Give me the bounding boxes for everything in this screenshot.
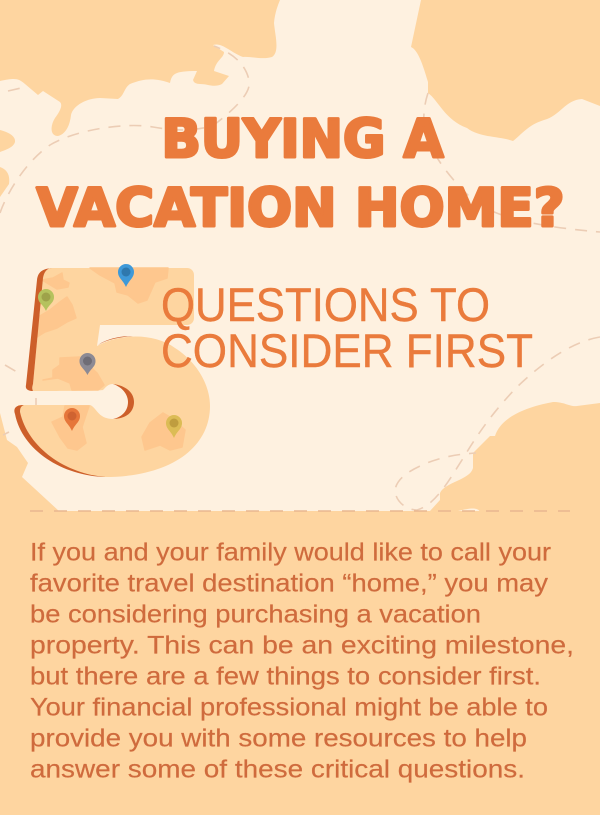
bottom panel — [0, 511, 600, 815]
map: top right land — [411, 0, 600, 141]
dashed divider — [30, 510, 570, 512]
body paragraph: Your financial professional might be able to — [30, 694, 548, 722]
body paragraph: answer some of these critical questions. — [30, 756, 525, 784]
map: top left land — [0, 0, 280, 136]
pin: blue — [118, 264, 134, 287]
body paragraph: be considering purchasing a vacation — [30, 600, 481, 628]
continents on number 5 — [37, 268, 185, 450]
subtitle: CONSIDER FIRST — [161, 324, 533, 377]
big number 5 — [14, 268, 210, 477]
number 5 shadow — [14, 268, 134, 477]
title — [36, 109, 564, 239]
map pins — [38, 264, 182, 438]
pin: green — [38, 289, 54, 311]
body paragraph: provide you with some resources to help — [30, 724, 527, 752]
title: VACATION HOME? — [36, 178, 564, 239]
pin: grey — [80, 353, 96, 375]
subtitle: QUESTIONS TO — [161, 278, 490, 331]
number 5 body — [18, 268, 210, 477]
map: left edge islands — [0, 130, 15, 197]
map: bottom right land — [430, 402, 600, 512]
body paragraph: favorite travel destination “home,” you may — [30, 570, 549, 598]
title: BUYING A — [162, 109, 444, 170]
pin: orange — [64, 408, 80, 431]
body paragraph: If you and your family would like to call your — [30, 538, 551, 566]
dashed travel routes — [0, 46, 600, 510]
map: bottom left land — [0, 413, 60, 512]
pin: yellow — [166, 415, 182, 438]
body paragraph: property. This can be an exciting milestone, — [30, 632, 574, 660]
body paragraph — [30, 538, 574, 784]
body paragraph: but there are a few things to consider first. — [30, 662, 541, 690]
subtitle — [161, 278, 533, 377]
